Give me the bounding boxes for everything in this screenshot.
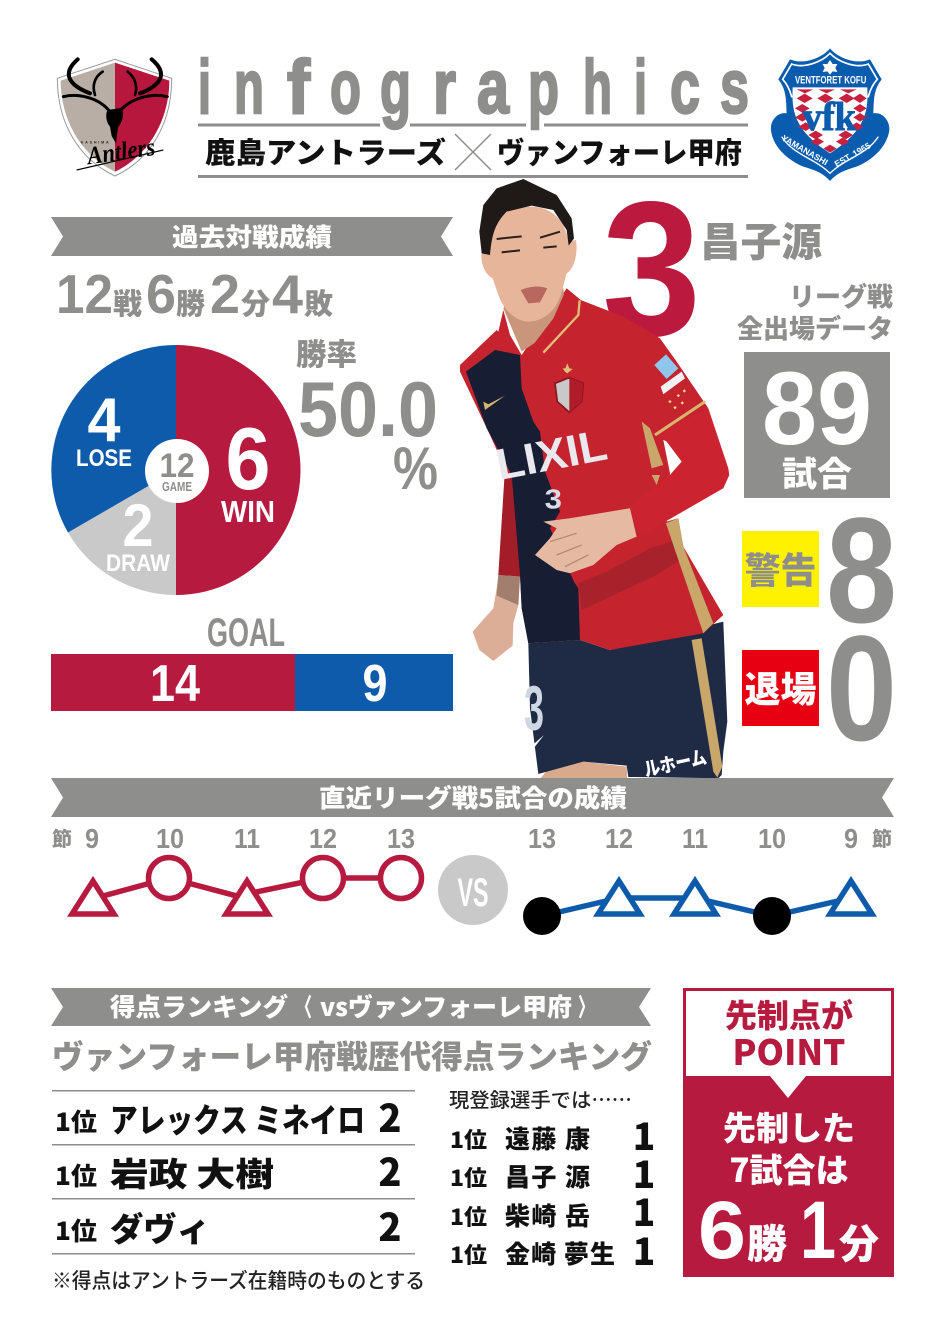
player: far arm xyxy=(473,575,520,661)
banner: goal ranking: 〈 xyxy=(296,988,312,1024)
appearances box xyxy=(744,351,890,498)
matchday numbers: 13 xyxy=(387,823,415,854)
matchday numbers: 13 xyxy=(528,823,556,854)
banner: last five league matches: 直近リーグ戦5試合の成績 xyxy=(319,779,627,815)
appearances box: 試合 xyxy=(782,447,852,496)
match heading: teams: 鹿島アントラーズ xyxy=(205,130,446,172)
ranking table: all time: 2 xyxy=(378,1142,402,1197)
ranking table: current players: 柴崎 岳 xyxy=(505,1197,590,1233)
yellow card stat: 8 xyxy=(826,486,897,654)
pie chart: win draw lose: DRAW xyxy=(106,550,170,577)
panel: first goal point: 先制点が xyxy=(725,991,853,1037)
matchday numbers: 節 xyxy=(872,823,892,852)
pie chart: win draw lose: 6 xyxy=(226,409,270,508)
banner: goal ranking: vsヴァンフォーレ甲府 xyxy=(320,988,572,1024)
icon: Ventforet Kofu crest: YAMANASHI xyxy=(780,133,830,167)
player: sleeve patch xyxy=(654,354,686,409)
player: shirt shadow xyxy=(578,540,683,610)
ranking table: current players xyxy=(449,1084,655,1276)
goal bar xyxy=(51,654,453,713)
caption: league appearances: リーグ戦 xyxy=(789,277,893,314)
pie chart: win draw lose: LOSE xyxy=(76,445,132,472)
player: far forearm shadow xyxy=(497,575,520,605)
panel: first goal point: 勝 xyxy=(747,1212,787,1270)
icon: Ventforet Kofu crest xyxy=(771,48,889,181)
matchday numbers: 11 xyxy=(234,823,260,854)
player: shorts markings: 3 xyxy=(524,674,544,744)
pie chart: win draw lose: 12 xyxy=(160,447,194,485)
player: shorts markings xyxy=(524,674,709,782)
ranking table: current players: 遠藤 康 xyxy=(505,1120,590,1156)
banner: goal ranking: 〉 xyxy=(578,988,594,1024)
pie chart: win draw lose: GAME xyxy=(162,479,192,494)
overall record: 2 xyxy=(210,263,240,325)
overall record: 戦 xyxy=(113,281,142,323)
overall record: 6 xyxy=(146,263,176,325)
red card stat: 退場 xyxy=(744,661,817,713)
ranking table: all time: 2 xyxy=(378,1197,402,1252)
player: arm sleeve xyxy=(630,408,729,533)
overall record: 敗 xyxy=(304,281,333,323)
banner: goal ranking xyxy=(51,988,651,1026)
yellow card stat: 警告 xyxy=(744,542,817,594)
caption: league appearances xyxy=(737,277,893,346)
icon: Kashima Antlers crest: Antlers xyxy=(83,133,157,171)
icon: Ventforet Kofu crest: EST. 1965 xyxy=(833,140,872,169)
title: r xyxy=(433,45,456,130)
vs badge: VS xyxy=(458,871,488,915)
overall record: 12 xyxy=(56,263,113,325)
vs badge xyxy=(438,855,508,925)
player: sponsor LIXIL: LIXIL xyxy=(492,421,611,490)
panel: first goal point xyxy=(683,988,894,1277)
win rate: 50.0 xyxy=(298,365,438,453)
ranking table: current players: 1位 xyxy=(450,1161,487,1193)
player: sleeve gold band xyxy=(655,402,705,435)
panel: first goal point: 分 xyxy=(839,1212,879,1270)
panel: first goal point: 先制した xyxy=(723,1102,855,1150)
overall record: 勝 xyxy=(176,281,205,323)
title: n xyxy=(234,45,264,130)
title: c xyxy=(670,45,700,130)
panel: first goal point: 1 xyxy=(800,1185,836,1276)
title xyxy=(198,45,749,130)
player: shorts stripe xyxy=(692,638,722,778)
player: hair xyxy=(479,179,574,255)
player: back number: 3 xyxy=(545,483,562,514)
matchday numbers: 9 xyxy=(844,823,858,854)
pie chart: win draw lose: 2 xyxy=(122,492,154,559)
player: shirt logo xyxy=(483,396,505,410)
player: far sleeve xyxy=(498,468,526,577)
ranking table: current players: 1位 xyxy=(450,1200,487,1232)
player: crest on shirt xyxy=(555,363,583,412)
player: mouth xyxy=(521,286,547,303)
ranking table: all time: 岩政 大樹 xyxy=(110,1148,274,1196)
red card stat: 0 xyxy=(826,604,897,772)
pie chart: win draw lose: WIN xyxy=(221,494,275,529)
icon: Ventforet Kofu crest: VENTFORET KOFU xyxy=(795,74,867,86)
title rules xyxy=(198,124,748,178)
ranking table: current players: 現登録選手では…… xyxy=(449,1084,632,1113)
footnote: ※得点はアントラーズ在籍時のものとする xyxy=(52,1265,425,1295)
overall record: 4 xyxy=(272,263,303,325)
player: collar trim xyxy=(543,300,580,353)
yellow card stat xyxy=(742,486,897,654)
matchday numbers: 9 xyxy=(85,823,99,854)
ranking table: all time: 2 xyxy=(378,1088,402,1143)
match heading: teams xyxy=(205,130,742,172)
overall record: 分 xyxy=(241,281,270,323)
matchday numbers xyxy=(52,823,892,854)
icon: Kashima Antlers crest: KASHIMA xyxy=(81,140,109,144)
banner: past record: 過去対戦成績 xyxy=(172,218,332,254)
goal bar: 14 xyxy=(150,655,200,713)
appearances box: 89 xyxy=(762,351,872,467)
player: shirt xyxy=(460,288,723,650)
matchday numbers: 11 xyxy=(682,823,708,854)
matchday numbers: 10 xyxy=(156,823,184,854)
red card stat xyxy=(742,604,897,772)
ranking table: all time: ダヴィ xyxy=(110,1203,210,1251)
title: o xyxy=(330,45,361,130)
title: s xyxy=(720,45,749,130)
line chart: Kofu results xyxy=(523,881,872,935)
match heading: teams: ヴァンフォーレ甲府 xyxy=(497,130,742,172)
player: shorts xyxy=(528,622,727,778)
title: f xyxy=(287,45,311,130)
win rate: % xyxy=(393,435,438,502)
ranking table: current players: 金崎 夢生 xyxy=(505,1235,615,1271)
ranking table: all time xyxy=(52,1088,415,1254)
pie chart: win draw lose xyxy=(51,345,301,595)
caption: league appearances: 全出場データ xyxy=(737,309,893,346)
icon: Kashima Antlers crest xyxy=(57,59,172,176)
goal label: GOAL xyxy=(207,611,285,655)
panel: first goal point: 7試合は xyxy=(729,1144,849,1192)
ranking table: current players: 1位 xyxy=(450,1123,487,1155)
player: hand xyxy=(535,508,637,573)
win rate: 勝率 xyxy=(296,330,357,374)
title: g xyxy=(380,45,411,130)
matchday numbers: 12 xyxy=(309,823,337,854)
icon: Ventforet Kofu crest: vfk xyxy=(803,94,857,139)
ranking table: all time: 1位 xyxy=(55,1212,97,1248)
title: a xyxy=(477,45,510,130)
player: leg xyxy=(541,762,627,778)
ranking heading: ヴァンフォーレ甲府戦歴代得点ランキング xyxy=(52,1032,652,1078)
player: brows and eyes xyxy=(497,232,560,252)
player: navy shirt panel xyxy=(466,350,580,643)
matchday numbers: 10 xyxy=(758,823,786,854)
ranking table: current players: 1 xyxy=(633,1145,655,1199)
ranking table: current players: 1 xyxy=(633,1183,655,1237)
title: h xyxy=(583,45,612,130)
player: finger creases xyxy=(550,533,588,567)
overall record xyxy=(56,263,333,325)
ranking table: all time: 1位 xyxy=(55,1157,97,1193)
player: collar xyxy=(497,288,581,355)
uniform number: 3 xyxy=(602,161,701,376)
ranking table: all time: アレックス ミネイロ xyxy=(110,1094,365,1142)
win rate xyxy=(296,330,438,502)
banner: goal ranking: 得点ランキング xyxy=(110,988,288,1024)
player photo illustration xyxy=(460,179,729,782)
matchday numbers: 12 xyxy=(605,823,633,854)
player: side stripe xyxy=(642,422,713,633)
player name: 昌子源 xyxy=(700,210,822,268)
player: face xyxy=(481,207,577,322)
banner: last five league matches xyxy=(51,778,894,817)
panel: first goal point: POINT xyxy=(733,1025,845,1076)
goal bar: 9 xyxy=(362,655,388,713)
title: p xyxy=(528,45,559,130)
title: i xyxy=(198,45,211,130)
ranking table: current players: 1位 xyxy=(450,1238,487,1270)
ranking table: current players: 1 xyxy=(633,1222,655,1276)
ranking table: current players: 1 xyxy=(633,1107,655,1161)
panel: first goal point: 6 xyxy=(698,1185,746,1276)
player: shorts markings: ルホーム xyxy=(641,742,709,782)
line chart: Kashima results xyxy=(72,858,422,914)
ranking table: current players: 昌子 源 xyxy=(505,1158,590,1194)
ranking table: all time: 1位 xyxy=(55,1103,97,1139)
pie chart: win draw lose: 4 xyxy=(88,386,121,455)
matchday numbers: 節 xyxy=(52,823,72,852)
banner: past record xyxy=(51,217,453,256)
player: neck xyxy=(503,288,565,352)
title: i xyxy=(634,45,647,130)
